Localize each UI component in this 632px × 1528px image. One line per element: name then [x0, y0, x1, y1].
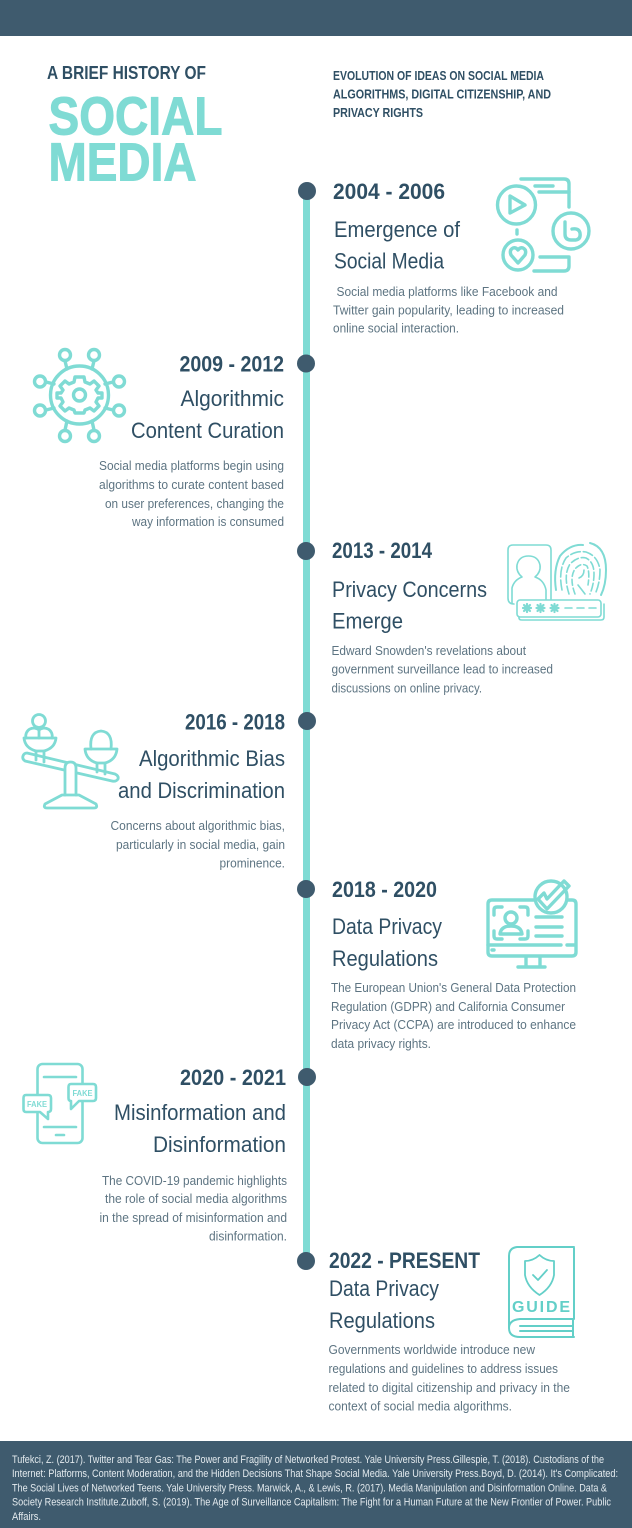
description — [331, 981, 576, 1051]
description: Privacy Act (CCPA) are introduced to enhance — [331, 1018, 576, 1032]
heading: Content Curation — [131, 418, 284, 443]
icon: phone with fake bubbles — [24, 1064, 96, 1143]
heading — [329, 1276, 439, 1333]
description: on user preferences, changing the — [105, 497, 284, 511]
description: way information is consumed — [131, 515, 284, 529]
description — [99, 459, 284, 529]
heading: and Discrimination — [118, 778, 285, 803]
panel: 2022-present — [328, 1247, 574, 1414]
heading: Algorithmic Bias — [139, 746, 285, 771]
main title — [48, 86, 222, 192]
description: Social media platforms begin using — [99, 459, 284, 473]
panel: 2020-2021 — [24, 1064, 287, 1244]
description: Edward Snowden's revelations about — [332, 644, 526, 658]
heading: Social Media — [334, 248, 445, 274]
heading: Data Privacy — [332, 914, 442, 939]
description: Twitter gain popularity, leading to increased — [333, 304, 564, 318]
icon: balance scale — [23, 714, 118, 808]
main title: SOCIAL — [48, 86, 222, 146]
year: 2022 - PRESENT — [329, 1248, 480, 1273]
main title: MEDIA — [48, 132, 196, 192]
icon: social media phone — [498, 179, 589, 271]
description — [333, 285, 564, 336]
heading — [332, 577, 487, 634]
description: discussions on online privacy. — [332, 682, 482, 696]
references — [12, 1454, 618, 1523]
heading — [118, 746, 285, 803]
description: in the spread of misinformation and — [100, 1211, 287, 1225]
timeline dots — [297, 182, 316, 1270]
heading: Regulations — [332, 946, 438, 971]
description — [100, 1174, 287, 1244]
heading: Emergence of — [334, 217, 461, 242]
subtitle: ALGORITHMS, DIGITAL CITIZENSHIP, AND — [333, 86, 551, 102]
description: the role of social media algorithms — [105, 1192, 287, 1206]
year: 2020 - 2021 — [180, 1065, 286, 1090]
heading: Algorithmic — [180, 386, 284, 411]
description: government surveillance lead to increased — [332, 662, 553, 676]
description: related to digital citizenship and privacy in the — [328, 1381, 570, 1395]
phone body — [38, 1064, 82, 1143]
heading — [114, 1100, 286, 1157]
heading: Emerge — [332, 608, 403, 634]
description: disinformation. — [209, 1230, 287, 1244]
footer panel — [0, 1441, 632, 1528]
icon: guide book — [509, 1247, 574, 1337]
description: context of social media algorithms. — [328, 1400, 512, 1414]
description: online social interaction. — [333, 322, 459, 336]
left bubble: FAKE — [27, 1100, 48, 1109]
timeline line — [303, 191, 310, 1261]
panel: 2004-2006 — [333, 179, 589, 336]
heading: Data Privacy — [329, 1276, 439, 1301]
description: algorithms to curate content based — [99, 478, 284, 492]
description — [332, 644, 553, 696]
description — [328, 1343, 570, 1414]
description — [110, 819, 285, 870]
year: 2016 - 2018 — [185, 710, 285, 734]
references: Affairs. — [12, 1511, 41, 1523]
panel: 2013-2014 — [332, 538, 606, 696]
heading — [131, 386, 284, 443]
panel: 2016-2018 — [23, 710, 285, 870]
panel: 2009-2012 — [34, 350, 284, 529]
year: 2009 - 2012 — [180, 352, 284, 376]
description: The European Union's General Data Protection — [331, 981, 576, 995]
year: 2018 - 2020 — [332, 877, 437, 902]
heading — [334, 217, 461, 274]
subtitle: PRIVACY RIGHTS — [333, 105, 423, 120]
icon: guide book: GUIDE — [512, 1299, 570, 1316]
description: particularly in social media, gain — [116, 838, 285, 852]
description: data privacy rights. — [331, 1037, 431, 1051]
heading: Regulations — [329, 1308, 435, 1333]
header band — [0, 0, 632, 36]
icon: fingerprint and password — [508, 543, 606, 620]
year: 2013 - 2014 — [332, 538, 433, 563]
heading: Disinformation — [153, 1132, 286, 1157]
heading — [332, 914, 442, 971]
panel: 2018-2020 — [331, 877, 576, 1051]
title block — [47, 62, 222, 192]
subtitle — [333, 68, 551, 120]
subtitle: EVOLUTION OF IDEAS ON SOCIAL MEDIA — [333, 68, 544, 83]
description: The COVID-19 pandemic highlights — [102, 1174, 287, 1188]
year: 2004 - 2006 — [333, 179, 445, 204]
description: regulations and guidelines to address issues — [328, 1362, 558, 1376]
heading: Misinformation and — [114, 1100, 286, 1125]
description: Regulation (GDPR) and California Consumer — [331, 1000, 565, 1014]
kicker: A BRIEF HISTORY OF — [47, 62, 206, 83]
description: Governments worldwide introduce new — [328, 1343, 536, 1357]
right bubble: FAKE — [72, 1089, 93, 1098]
icon: monitor with verified profile — [488, 881, 576, 967]
description: Concerns about algorithmic bias, — [110, 819, 285, 833]
icon: gear network — [34, 350, 124, 442]
heading: Privacy Concerns — [332, 577, 487, 602]
description: prominence. — [220, 856, 285, 870]
description: Social media platforms like Facebook and — [336, 285, 558, 299]
